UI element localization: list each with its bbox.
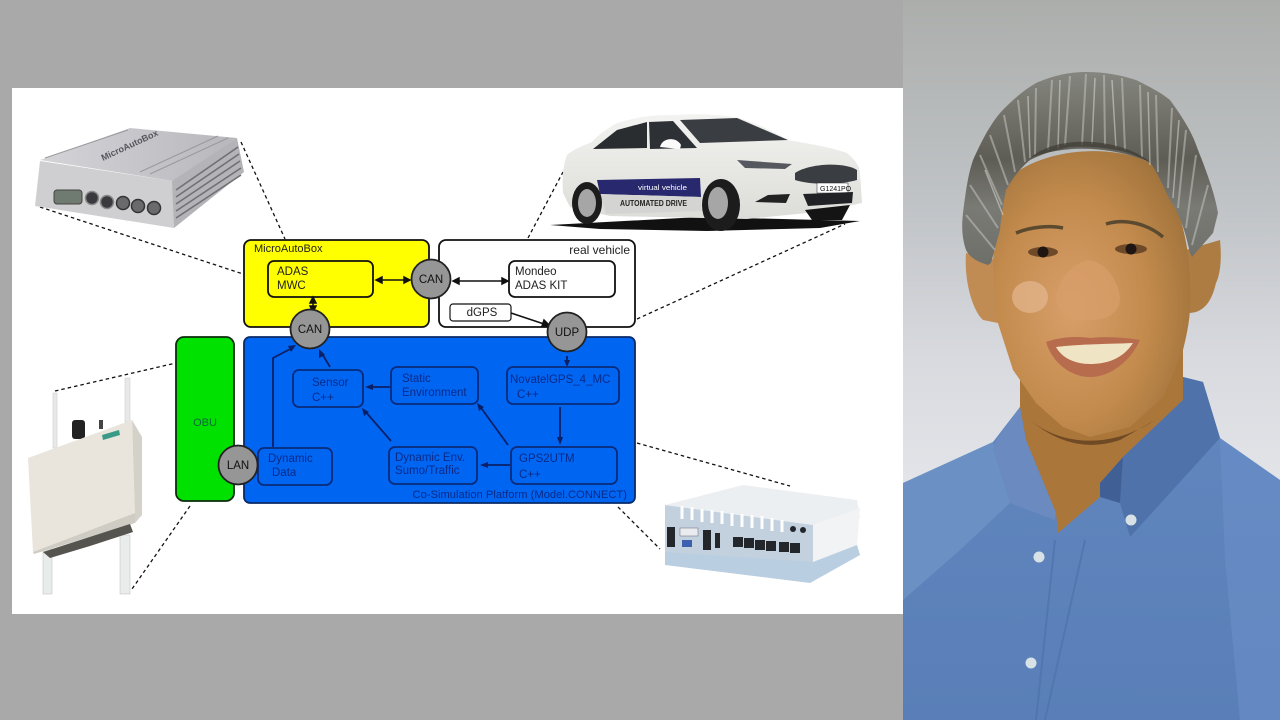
panel: Co-Simulation Platform: C++ <box>517 389 539 401</box>
eyes <box>1028 247 1058 257</box>
panel: OBU <box>176 337 234 501</box>
car livery <box>597 178 701 197</box>
arrows <box>273 347 567 465</box>
box: Mondeo ADAS KIT: Mondeo <box>515 266 557 278</box>
car front <box>737 160 792 169</box>
panel: OBU: OBU <box>193 417 217 429</box>
device: OBU router <box>28 378 142 594</box>
panel: Co-Simulation Platform: Environment <box>402 387 467 399</box>
panel: real vehicle: real vehicle <box>569 243 630 257</box>
panel: Co-Simulation Platform: C++ <box>519 469 541 481</box>
panel: real vehicle <box>439 240 635 327</box>
connector: LAN <box>218 446 258 484</box>
panel: white diagram slide <box>12 88 903 614</box>
panel: Co-Simulation Platform: Dynamic <box>268 453 313 465</box>
connector: UDP <box>548 312 586 352</box>
device: car: G1241PO <box>820 186 852 193</box>
buttons <box>1034 552 1044 562</box>
panel: Co-Simulation Platform: Dynamic Env. <box>395 452 465 464</box>
panel: portrait photo <box>903 0 1280 720</box>
panel: Co-Simulation Platform: NovatelGPS_4_MC <box>510 374 610 386</box>
face <box>993 151 1191 437</box>
nose <box>1056 260 1120 320</box>
hair <box>962 72 1218 265</box>
device: MicroAutoBox: MicroAutoBox <box>100 128 160 163</box>
cheek highlight <box>1012 281 1048 313</box>
connector: CAN top <box>412 260 450 298</box>
connector: CAN top: CAN <box>419 274 443 286</box>
device: embedded PC <box>665 485 860 583</box>
background <box>0 0 903 720</box>
panel: Co-Simulation Platform: Sumo/Traffic <box>395 465 460 477</box>
hair strands <box>966 74 1208 250</box>
device: car: virtual vehicle <box>638 183 687 192</box>
panel: Co-Simulation Platform: Data <box>272 467 297 479</box>
dashed connector lines <box>40 142 845 589</box>
panel: Co-Simulation Platform: C++ <box>312 392 334 404</box>
box: dGPS <box>450 304 511 321</box>
connector: LAN: LAN <box>227 460 249 472</box>
mouth <box>1046 337 1140 377</box>
device: car <box>550 114 862 231</box>
ears <box>966 253 998 323</box>
box: ADAS MWC: ADAS <box>277 266 309 278</box>
box: Mondeo ADAS KIT <box>509 261 615 297</box>
box: dGPS: dGPS <box>467 307 498 319</box>
panel: MicroAutoBox <box>244 240 429 327</box>
connector: UDP: UDP <box>555 327 579 339</box>
brows <box>1016 227 1063 233</box>
panel: Co-Simulation Platform: GPS2UTM <box>519 453 575 465</box>
device: car: AUTOMATED DRIVE <box>620 199 688 208</box>
panel: Co-Simulation Platform: Co-Simulation Platform (Model.CONNECT) <box>413 489 627 501</box>
connector: CAN left: CAN <box>298 324 322 336</box>
collar right <box>1120 377 1220 537</box>
connector: CAN left <box>290 310 330 348</box>
shirt <box>903 377 1280 720</box>
device: MicroAutoBox <box>35 128 244 228</box>
collar left <box>993 407 1056 520</box>
box: ADAS MWC: MWC <box>277 280 306 292</box>
panel: Co-Simulation Platform <box>244 337 635 503</box>
box: Mondeo ADAS KIT: ADAS KIT <box>515 280 567 292</box>
panel: Co-Simulation Platform: Static <box>402 373 431 385</box>
panel: Co-Simulation Platform: Sensor <box>312 377 349 389</box>
box: ADAS MWC <box>268 261 373 297</box>
car wheels <box>572 182 602 224</box>
neck <box>1020 330 1183 533</box>
panel: MicroAutoBox: MicroAutoBox <box>254 243 323 255</box>
